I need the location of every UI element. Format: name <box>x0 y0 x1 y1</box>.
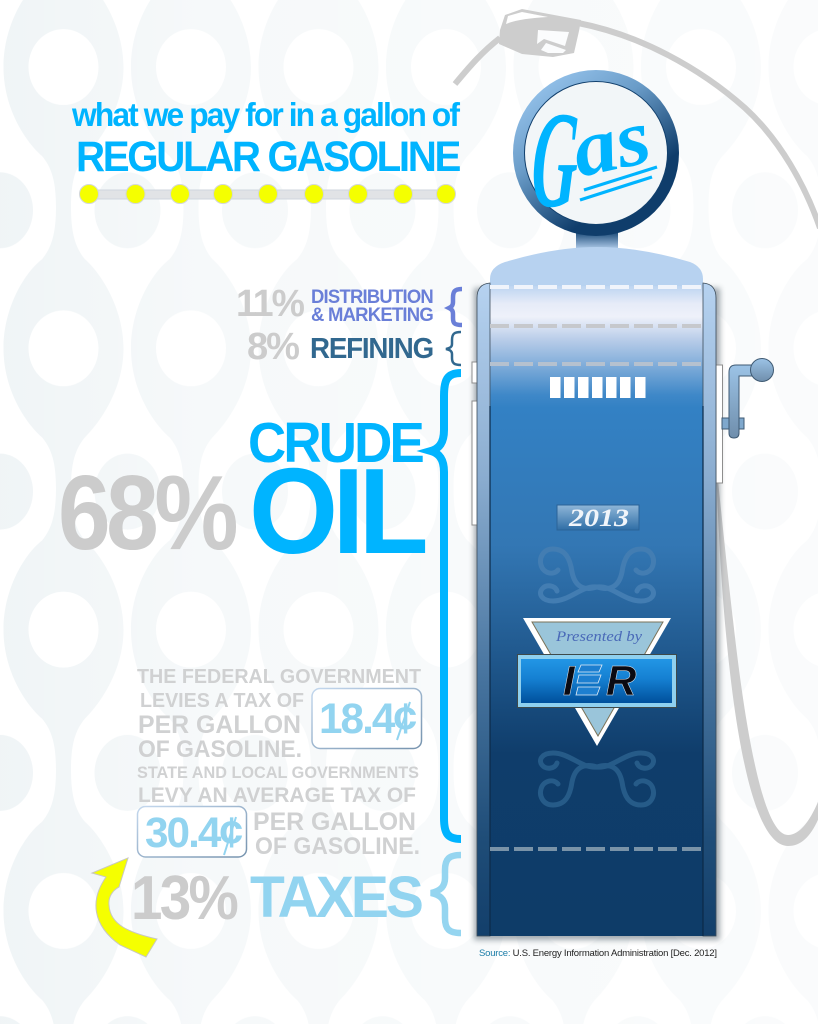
label: 11% distribution and marketing: 11% <box>236 283 304 325</box>
presented by emblem: I <box>563 657 576 704</box>
tax explanation text: OF GASOLINE. <box>255 833 420 860</box>
icon: fuel nozzle <box>455 9 581 84</box>
tax explanation text: THE FEDERAL GOVERNMENT <box>137 665 421 688</box>
globe neck <box>576 232 618 250</box>
year badge <box>557 505 639 532</box>
dotted divider <box>80 184 456 204</box>
label: 13% taxes <box>131 864 422 933</box>
presented by emblem: R <box>606 657 637 704</box>
tax explanation text: OF GASOLINE. <box>138 736 302 763</box>
label: 8% refining: REFINING <box>310 333 433 365</box>
title: what we pay for in a gallon of <box>71 96 461 133</box>
script word: Gas: G <box>529 84 582 237</box>
tax explanation text: LEVIES A TAX OF <box>140 689 304 712</box>
gas pump <box>472 70 774 940</box>
left side tabs <box>472 362 478 525</box>
hose: top arc <box>578 23 818 228</box>
logo mark: three stripes <box>576 665 602 695</box>
label: 13% taxes: 13% <box>131 864 238 933</box>
ornament: lower <box>540 753 654 805</box>
label: 68% crude oil <box>58 411 425 579</box>
tax explanation text: PER GALLON <box>138 711 301 739</box>
pump crown <box>490 247 703 290</box>
label: 68% crude oil: OIL <box>249 443 425 579</box>
label: 11% distribution and marketing: & MARKETING <box>311 305 433 326</box>
label: 8% refining: 8% <box>247 326 299 368</box>
presented by emblem <box>518 618 676 746</box>
label: 11% distribution and marketing <box>236 283 462 326</box>
tax explanation text <box>137 665 421 860</box>
hose: right side, hanging from the pump <box>716 460 818 846</box>
pump lever <box>722 358 774 438</box>
label: 13% taxes: TAXES <box>250 865 422 930</box>
gas globe sign <box>513 70 679 237</box>
script word: Gas: as <box>564 92 658 195</box>
callout: 30.4 cents state and local tax: 30.4¢ <box>145 809 242 857</box>
script word: Gas <box>529 84 658 237</box>
right side tab <box>716 365 722 483</box>
title: REGULAR GASOLINE <box>76 134 460 181</box>
label: 68% crude oil: CRUDE <box>248 411 423 475</box>
left side panel <box>477 283 490 936</box>
callout: 18.4 cents federal tax: 18.4¢ <box>319 695 416 743</box>
arrow: yellow curved <box>92 858 157 957</box>
label: 11% distribution and marketing: DISTRIBUTION <box>311 287 433 308</box>
tax explanation text: PER GALLON <box>253 808 416 836</box>
tax explanation text: LEVY AN AVERAGE TAX OF <box>138 784 416 807</box>
label: 68% crude oil: 68% <box>58 454 236 572</box>
presented by emblem: Presented by <box>555 629 642 645</box>
pump shadow <box>474 288 720 940</box>
title <box>71 96 461 181</box>
right side panel <box>703 283 716 936</box>
pump body <box>490 286 703 936</box>
brace: crude oil <box>431 373 461 839</box>
label: 8% refining <box>247 326 461 368</box>
brace: taxes <box>431 855 461 933</box>
tax explanation text: STATE AND LOCAL GOVERNMENTS <box>137 764 419 782</box>
year badge: 2013 <box>568 505 629 532</box>
source note: Source: U.S. Energy Information Administration [Dec. 2012] <box>479 948 717 959</box>
price display windows <box>550 377 646 398</box>
ornament: upper <box>540 549 654 601</box>
